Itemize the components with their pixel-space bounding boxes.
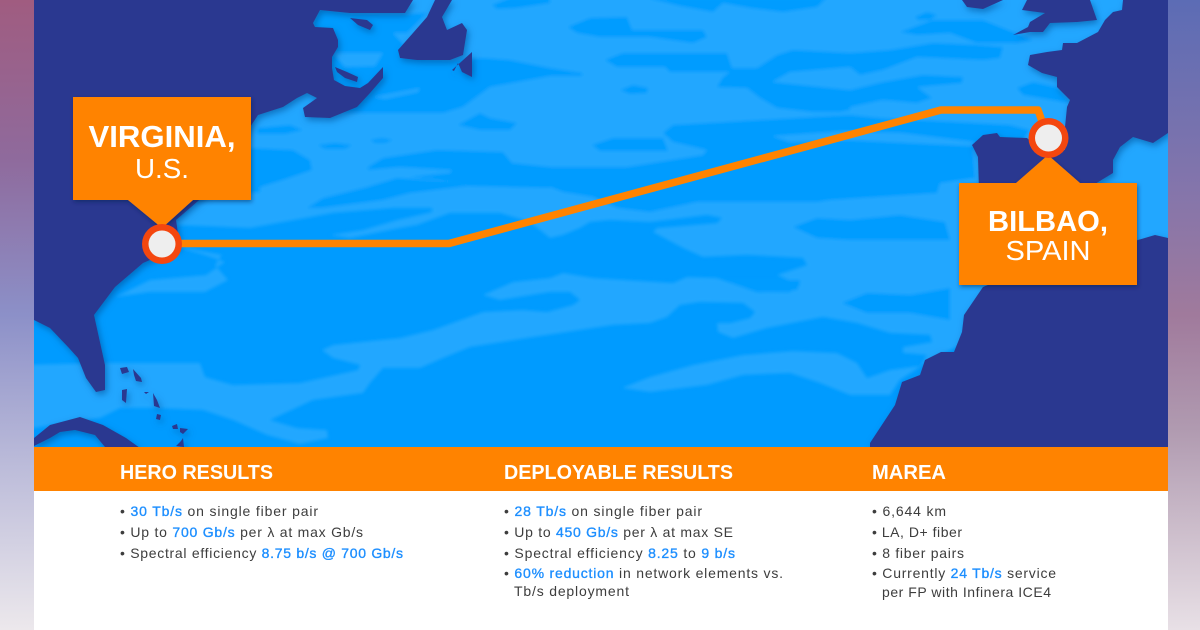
Cuba: [34, 417, 140, 448]
list: hero results: • Up to 700 Gb/s per λ at max Gb/s: [120, 524, 363, 540]
orange header band: [34, 447, 1168, 491]
Prince Edward Island: [335, 67, 358, 82]
list: deployable results: [504, 503, 783, 599]
Cornwall and Wales: [1013, 0, 1097, 35]
list: marea: • 8 fiber pairs: [872, 545, 964, 561]
callout: Bilbao: SPAIN: [1006, 235, 1090, 266]
list: hero results: [120, 503, 403, 561]
cable route: [162, 110, 1048, 244]
left background strip: [0, 0, 34, 630]
Bahamas: [120, 367, 188, 447]
callout: Virginia: [73, 97, 251, 228]
pin: Virginia: [142, 224, 182, 264]
list: marea: • Currently 24 Tb/s service: [872, 565, 1056, 581]
light water region: [20, 0, 1180, 444]
list: marea: per FP with Infinera ICE4: [882, 584, 1051, 600]
list: marea: • 6,644 km: [872, 503, 946, 519]
list: deployable results: • 28 Tb/s on single fiber pair: [504, 503, 702, 519]
Europe: [972, 0, 1168, 190]
list: marea: • LA, D+ fiber: [872, 524, 962, 540]
callout: Virginia: VIRGINIA,: [88, 119, 236, 154]
land masses: [34, 0, 1168, 448]
callout: Bilbao: BILBAO,: [988, 206, 1108, 238]
dark water patches: [240, 0, 1070, 320]
light water streaks: [115, 33, 1020, 297]
list: deployable results: Tb/s deployment: [514, 583, 629, 599]
pin: Bilbao: [1028, 118, 1068, 158]
right background strip: [1168, 0, 1200, 630]
list: deployable results: • Spectral efficiency 8.25 to 9 b/s: [504, 545, 735, 561]
Africa: [870, 235, 1168, 448]
list: deployable results: • Up to 450 Gb/s per λ at max SE: [504, 524, 733, 540]
callout: Virginia: U.S.: [135, 153, 189, 184]
heading: marea: MAREA: [872, 462, 946, 484]
Newfoundland: [398, 0, 467, 60]
panel: marea: [872, 462, 1056, 600]
list: deployable results: • 60% reduction in network elements vs.: [504, 565, 783, 581]
panel: hero results: [120, 462, 403, 561]
ocean base: [34, 205, 958, 447]
ocean currents: [20, 0, 1180, 444]
Britain: [962, 0, 1003, 9]
North America: [34, 0, 413, 392]
list: marea: [872, 503, 1056, 600]
heading: deployable results: DEPLOYABLE RESULTS: [504, 462, 733, 484]
heading: hero results: HERO RESULTS: [120, 462, 273, 484]
map panel: [20, 0, 1180, 448]
Cape island: [452, 52, 472, 77]
Anticosti: [350, 18, 373, 30]
list: hero results: • Spectral efficiency 8.75 b/s @ 700 Gb/s: [120, 545, 403, 561]
panel: deployable results: [504, 462, 783, 599]
callout: Bilbao: [959, 155, 1137, 285]
list: hero results: • 30 Tb/s on single fiber pair: [120, 503, 318, 519]
